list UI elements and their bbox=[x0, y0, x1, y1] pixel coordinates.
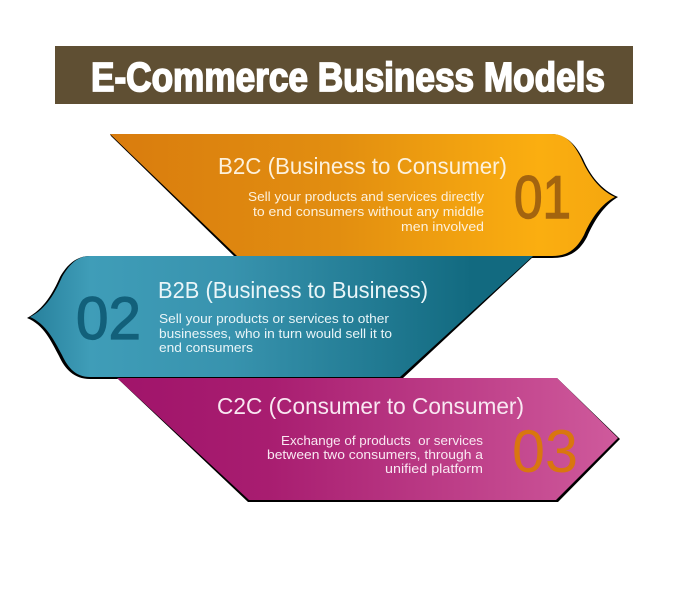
description: B2C bbox=[248, 189, 485, 234]
description: B2C: Sell your products and services directly bbox=[248, 189, 485, 204]
number 01: 01 bbox=[514, 164, 571, 231]
panel: B2C bbox=[110, 134, 618, 258]
heading: B2B: B2B (Business to Business) bbox=[158, 277, 428, 303]
description: C2C: unified platform bbox=[385, 461, 483, 476]
number 03: 03 bbox=[512, 418, 578, 485]
description: B2B: Sell your products or services to other bbox=[159, 311, 390, 326]
description: B2B bbox=[159, 311, 392, 355]
description: C2C bbox=[267, 433, 484, 476]
description: B2B: businesses, who in turn would sell it to bbox=[159, 326, 392, 341]
heading: B2C: B2C (Business to Consumer) bbox=[218, 153, 507, 179]
number 02: 02 bbox=[76, 285, 141, 352]
title: E-Commerce Business Models bbox=[91, 54, 605, 100]
description: B2C: men involved bbox=[401, 219, 484, 234]
panel: C2C bbox=[117, 378, 620, 502]
panel: B2B bbox=[27, 256, 534, 379]
description: B2B: end consumers bbox=[159, 340, 254, 355]
description: B2C: to end consumers without any middle bbox=[253, 204, 484, 219]
description: C2C: between two consumers, through a bbox=[267, 447, 484, 462]
heading: C2C: C2C (Consumer to Consumer) bbox=[217, 393, 524, 419]
title banner bbox=[55, 46, 633, 104]
description: C2C: Exchange of products or services bbox=[281, 433, 484, 448]
